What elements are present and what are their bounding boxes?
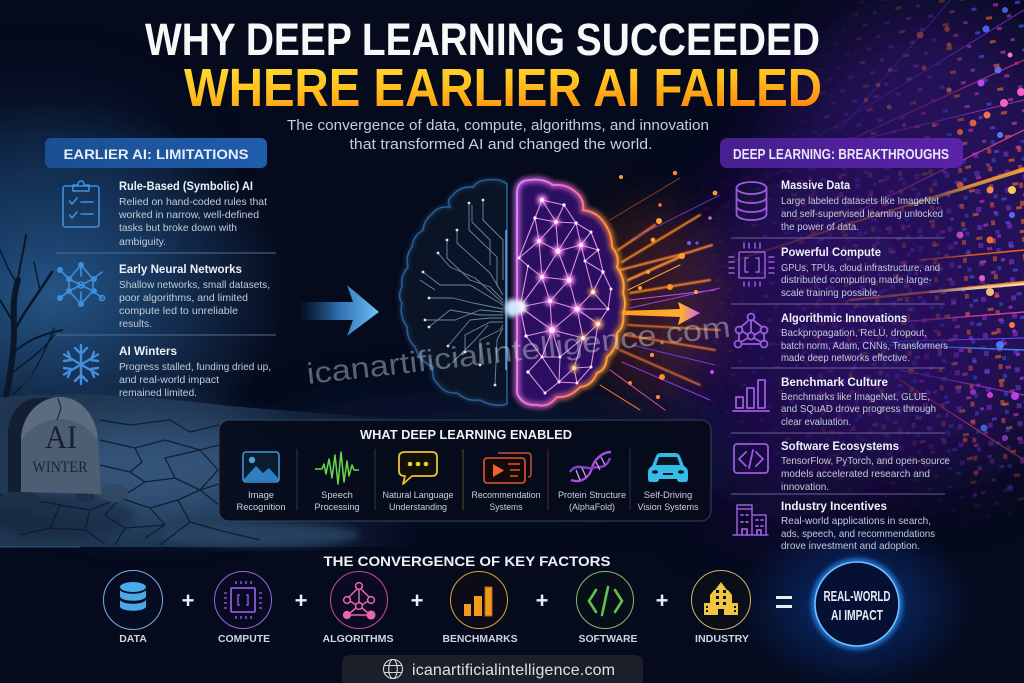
item: algorithmic innovations: Algorithmic Innovations [781, 311, 907, 325]
item: rule-based AI: tasks but broke down with [119, 223, 237, 234]
item: powerful compute [729, 243, 940, 299]
subtitle: The convergence of data, compute, algorithms, and innovation [287, 118, 709, 134]
rays from brain [600, 178, 720, 410]
item: early neural networks: Shallow networks, small datasets, [119, 280, 270, 291]
app: natural language understanding [382, 452, 454, 512]
centre flare [505, 299, 519, 317]
title [145, 14, 822, 118]
circuit traces [420, 200, 503, 385]
factor: benchmarks: BENCHMARKS [442, 633, 518, 645]
rubble [0, 484, 128, 517]
item: rule-based AI: ambiguity. [119, 237, 166, 248]
brain: right neural hemisphere [505, 180, 625, 406]
panel: earlier AI limitations [45, 138, 276, 399]
app: recommendation systems: Systems [490, 501, 523, 512]
item: massive data [736, 178, 943, 233]
tombstone: AI Winter [8, 397, 101, 494]
plus: + [182, 588, 194, 613]
icon: bar chart [733, 380, 769, 411]
heading: convergence: THE CONVERGENCE OF KEY FACTORS [324, 553, 610, 569]
item: rule-based AI: Rule-Based (Symbolic) AI [119, 179, 253, 193]
app: image recognition: Image [248, 489, 274, 500]
factor: data: DATA [119, 633, 147, 645]
factor: industry: INDUSTRY [695, 633, 749, 645]
tombstone: AI Winter: WINTER [32, 459, 88, 476]
tombstone: AI Winter: AI [45, 420, 77, 456]
title: WHERE EARLIER AI FAILED [184, 58, 822, 118]
app: natural language understanding: Natural Language [382, 489, 454, 500]
panel: deep learning breakthroughs [720, 138, 963, 552]
item: early neural networks [57, 262, 270, 330]
item: AI winters [64, 344, 271, 399]
item: rule-based AI: Relied on hand-coded rules that [119, 197, 267, 208]
factor: algorithms: ALGORITHMS [322, 633, 394, 645]
item: massive data: and self-supervised learning unlocked [781, 209, 943, 220]
panel: what deep learning enabled [219, 420, 711, 521]
item: benchmark culture: Benchmark Culture [781, 375, 888, 389]
item: rule-based AI [63, 179, 267, 248]
brain: left circuit hemisphere [400, 180, 507, 405]
glowing spine [504, 184, 508, 404]
item: rule-based AI: worked in narrow, well-defined [118, 210, 259, 221]
plus: + [656, 588, 668, 613]
left arrow [298, 285, 379, 336]
factor: compute [214, 572, 272, 645]
app: image recognition [236, 452, 286, 512]
item: algorithmic innovations: batch norm, Adam, CNNs, Transformers [781, 341, 948, 352]
title: WHY DEEP LEARNING SUCCEEDED [145, 14, 820, 65]
item: AI winters: Progress stalled, funding dried up, [119, 362, 271, 373]
item: software ecosystems: Software Ecosystems [781, 439, 899, 453]
factor: algorithms [322, 572, 394, 645]
item: massive data: the power of data. [781, 222, 859, 233]
heading: deep learning: DEEP LEARNING: BREAKTHROUGHS [733, 147, 949, 163]
factor: software [576, 572, 638, 645]
subtitle [287, 118, 709, 153]
icon: chip [729, 243, 774, 286]
icon: clipboard [63, 181, 99, 227]
particles near brain [619, 171, 717, 399]
icon: database [736, 182, 766, 220]
item: powerful compute: scale training possible. [781, 288, 880, 299]
item: powerful compute: GPUs, TPUs, cloud infrastructure, and [781, 263, 940, 274]
item: benchmark culture: clear evaluation. [781, 417, 851, 428]
right arrow [622, 302, 700, 325]
item: AI winters: remained limited. [119, 388, 197, 399]
app: speech processing [314, 452, 360, 512]
watermark: icanartificialintelligence.com [305, 311, 732, 391]
item: software ecosystems: models accelerated research and [781, 469, 930, 480]
factor: industry [692, 570, 750, 645]
icon: snowflake [64, 345, 98, 384]
item: benchmark culture: Benchmarks like ImageNet, GLUE, [781, 392, 930, 403]
factor: data [104, 570, 162, 645]
app: image recognition: Recognition [236, 501, 286, 512]
app: natural language understanding: Understanding [389, 501, 447, 512]
footer: website badge: icanartificialintelligence.com [412, 662, 615, 679]
icon: globe [384, 660, 402, 678]
item: algorithmic innovations: made deep networks effective. [781, 353, 910, 364]
subtitle: that transformed AI and changed the world. [350, 137, 652, 153]
heading: earlier AI [45, 138, 267, 168]
app: recommendation systems [472, 453, 540, 512]
item: algorithmic innovations [734, 311, 948, 364]
icon: code brackets [734, 444, 768, 473]
factor: software: SOFTWARE [578, 633, 638, 645]
app: speech processing: Speech [321, 489, 353, 500]
item: industry incentives [733, 499, 935, 552]
app: self-driving vision: Vision Systems [638, 501, 699, 512]
panel heading: WHAT DEEP LEARNING ENABLED [360, 427, 572, 442]
plus: + [536, 588, 548, 613]
item: early neural networks: results. [119, 319, 152, 330]
item: software ecosystems: innovation. [781, 482, 829, 493]
app: protein structure: (AlphaFold) [569, 501, 615, 512]
item: early neural networks: Early Neural Networks [119, 262, 242, 276]
app: recommendation systems: Recommendation [472, 489, 540, 500]
app: self-driving vision: Self-Driving [644, 489, 692, 500]
item: industry incentives: Real-world applications in search, [781, 516, 931, 527]
section: convergence of key factors [104, 553, 900, 647]
item: benchmark culture: and SQuAD drove progress through [781, 404, 936, 415]
result: real-world AI impact: REAL-WORLD [824, 588, 891, 605]
factor: compute: COMPUTE [218, 633, 270, 645]
background: right data particles [688, 0, 1024, 523]
item: software ecosystems: TensorFlow, PyTorch, and open-source [781, 456, 950, 467]
footer: website badge [342, 655, 643, 683]
plus: + [411, 588, 423, 613]
item: AI winters: and real-world impact [119, 375, 219, 386]
neural nodes [517, 198, 612, 394]
item: AI winters: AI Winters [119, 344, 177, 358]
item: industry incentives: ads, speech, and recommendations [781, 529, 935, 540]
app: self-driving vision [638, 453, 699, 512]
app: speech processing: Processing [314, 501, 360, 512]
convergence band divider [80, 546, 724, 548]
result: real-world AI impact [814, 561, 900, 647]
item: industry incentives: Industry Incentives [781, 499, 887, 513]
app: protein structure: Protein Structure [558, 489, 626, 500]
item: early neural networks: poor algorithms, and limited [119, 293, 248, 304]
item: benchmark culture [733, 375, 936, 428]
heading: deep learning [720, 138, 963, 168]
background: tree, cracked earth [0, 235, 420, 547]
neural nodes glow [513, 195, 603, 372]
heading: earlier AI: EARLIER AI: LIMITATIONS [64, 147, 248, 163]
orange glow right of brain [580, 205, 720, 395]
ground edge line [0, 546, 80, 548]
plus: + [295, 588, 307, 613]
item: software ecosystems [734, 439, 950, 493]
item: industry incentives: drove investment and adoption. [781, 541, 920, 552]
equals sign [776, 598, 792, 606]
bare winter tree [0, 235, 62, 415]
app: protein structure [558, 452, 626, 512]
item: algorithmic innovations: Backpropagation, ReLU, dropout, [781, 328, 927, 339]
item: early neural networks: compute led to unreliable [119, 306, 238, 317]
result: real-world AI impact: AI IMPACT [831, 607, 883, 624]
item: massive data: Massive Data [781, 178, 850, 192]
icon: algorithm graph [734, 314, 768, 348]
item: massive data: Large labeled datasets like ImageNet [781, 196, 939, 207]
column dividers [297, 449, 630, 510]
factor: benchmarks [442, 572, 518, 645]
item: powerful compute: distributed computing made large- [781, 275, 932, 286]
icon: office buildings [733, 505, 768, 535]
icon: neural network [57, 262, 104, 307]
ground [0, 394, 420, 547]
neural mesh [519, 200, 611, 393]
item: powerful compute: Powerful Compute [781, 245, 881, 259]
